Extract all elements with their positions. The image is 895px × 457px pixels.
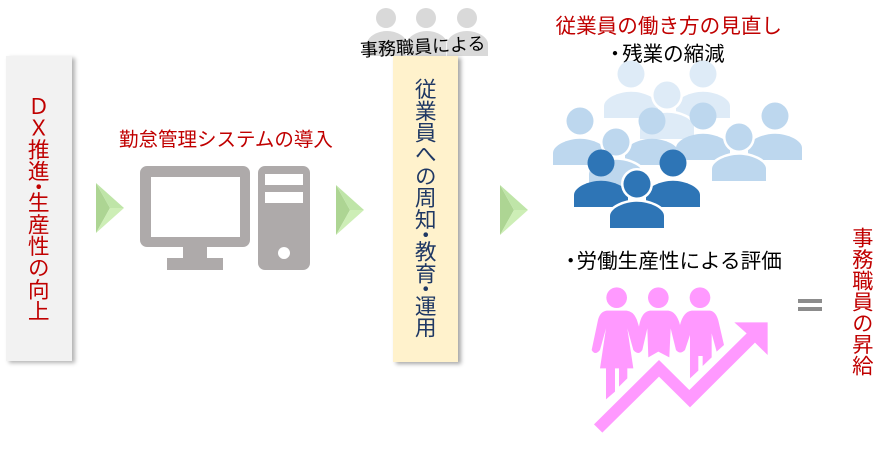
heading: attendance system: 勤怠管理システムの導入 bbox=[119, 128, 333, 150]
text: overtime reduction: ・残業の縮減 bbox=[605, 42, 725, 66]
arrow 3 bbox=[500, 185, 528, 235]
arrow 1 bbox=[96, 183, 124, 233]
text: staff education: 従業員への周知・教育・運用 bbox=[412, 78, 437, 338]
heading: work style review: 従業員の働き方の見直し bbox=[556, 14, 782, 38]
text: DX goal: ＤＸ推進・生産性の向上 bbox=[25, 95, 50, 322]
panel: DX goal bbox=[6, 56, 72, 361]
arrow 2 bbox=[336, 185, 364, 235]
label: office staff: 事務職員による bbox=[360, 34, 486, 60]
icon: equals sign bbox=[798, 299, 822, 311]
panel: staff education bbox=[393, 56, 458, 362]
text: staff pay raise: 事務職員の昇給 bbox=[849, 227, 873, 376]
text: productivity evaluation: ・労働生産性による評価 bbox=[560, 250, 782, 273]
